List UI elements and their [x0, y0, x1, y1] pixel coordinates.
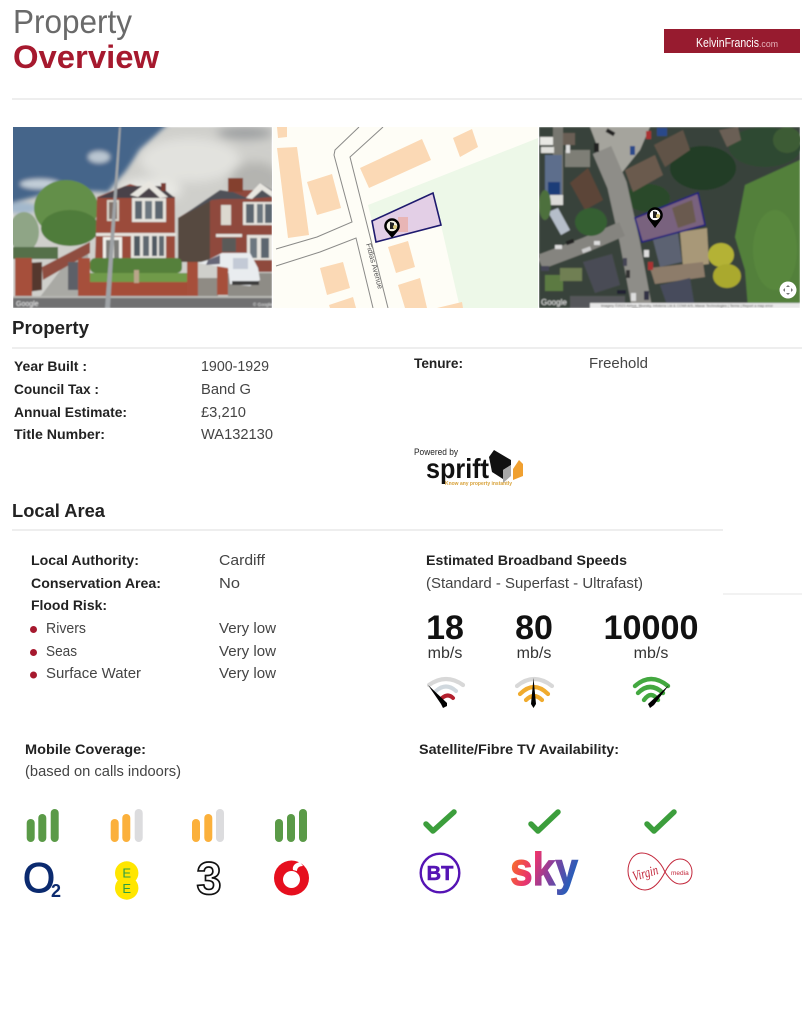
local area details: Very low — [219, 666, 277, 682]
main house — [95, 184, 175, 262]
logo: Powered by Sprift — [414, 447, 523, 487]
title — [13, 3, 159, 75]
green space — [368, 138, 538, 308]
map pin — [384, 218, 400, 238]
road — [13, 296, 272, 298]
local area details: Very low — [219, 621, 277, 637]
broadband heading — [426, 552, 643, 592]
logo: EE: E — [122, 881, 131, 896]
dark tree canopy — [670, 146, 736, 190]
property details: Tenure: — [414, 355, 463, 371]
local area details: No — [219, 576, 240, 592]
mobile coverage heading — [25, 741, 181, 780]
broadband heading: (Standard - Superfast - Ultrafast) — [426, 576, 643, 592]
attribution bar — [590, 303, 800, 308]
TV heading: Satellite/Fibre TV Availability: — [419, 741, 619, 757]
property details: WA132130 — [201, 427, 273, 443]
yellow trees — [708, 243, 734, 267]
title: Overview — [13, 39, 159, 75]
gauge: superfast — [517, 678, 552, 708]
map pin — [647, 207, 663, 228]
property details: Band G — [201, 382, 251, 398]
logo: Virgin Media: Virgin — [631, 863, 660, 885]
broadband speed figures: mb/s — [634, 645, 668, 662]
logo: BT — [421, 854, 459, 892]
broadband speed figures: mb/s — [517, 645, 551, 662]
road outlines — [276, 127, 388, 308]
local area details: Seas — [46, 644, 77, 660]
logo: Sky: sky — [510, 843, 578, 895]
local area details: Conservation Area: — [31, 575, 161, 591]
right house — [178, 190, 272, 272]
logo: EE — [115, 861, 138, 900]
property details — [14, 355, 648, 443]
street view photo: Google — [16, 301, 39, 308]
trees — [33, 180, 98, 226]
logo: EE: E — [122, 866, 131, 880]
broadband speed figures — [426, 609, 698, 662]
local area details: Very low — [219, 644, 277, 660]
logo: KelvinFrancis.com: .com — [759, 39, 778, 49]
gauge: standard — [428, 679, 463, 708]
local area details — [30, 552, 277, 682]
logo: Vodafone — [274, 860, 309, 896]
property details: £3,210 — [201, 405, 246, 421]
satellite view: Imagery ©2023 Airbus, Bluesky, Infoterra Ltd & COWI A/S, Maxar Technologies | Terms | Report a map error — [601, 304, 774, 308]
signal bars: EE — [111, 809, 143, 842]
driveway right — [228, 273, 272, 297]
parking and roads — [589, 127, 651, 172]
broadband heading: Estimated Broadband Speeds — [426, 552, 627, 568]
driveway and wall — [40, 252, 90, 297]
logo: KelvinFrancis.com: KelvinFrancis — [696, 36, 759, 50]
houses south — [653, 233, 682, 267]
hedge and lawn — [90, 258, 182, 273]
fullscreen control — [780, 282, 796, 298]
property details: 1900-1929 — [201, 359, 269, 375]
local area details: Surface Water — [46, 666, 141, 682]
mobile coverage heading: (based on calls indoors) — [25, 764, 181, 780]
broadband speed figures: mb/s — [428, 645, 462, 662]
parked cars — [541, 128, 667, 301]
van — [198, 253, 260, 286]
logo: O2: O — [23, 854, 55, 901]
signal bars: O2 — [27, 809, 59, 842]
garden tree — [575, 208, 607, 236]
property details: Freehold — [589, 356, 648, 372]
logo: O2: 2 — [51, 881, 61, 901]
buildings — [277, 127, 478, 308]
title: Property — [13, 3, 132, 40]
property details: Council Tax : — [14, 381, 99, 397]
broadband speed figures: 10000 — [604, 609, 698, 647]
logo: BT: BT — [427, 863, 453, 885]
logo: Three: 3 — [196, 853, 222, 904]
broadband speed figures: 18 — [426, 609, 464, 647]
street name: Fidlas Avenue — [364, 242, 385, 290]
grass field — [735, 160, 800, 308]
property details: Year Built : — [14, 358, 87, 374]
property details: Title Number: — [14, 426, 105, 442]
front wall — [87, 282, 188, 296]
site plan map — [273, 127, 538, 308]
signal bars: Three — [192, 809, 224, 842]
plot overlay — [635, 193, 705, 242]
signal bars: Vodafone — [275, 809, 307, 842]
plot outline — [372, 193, 441, 242]
satellite view: Google — [541, 298, 567, 307]
lamp post — [105, 127, 121, 308]
local area details: Rivers — [46, 621, 86, 637]
satellite view — [539, 127, 801, 308]
logo: Virgin Media — [628, 853, 692, 890]
logo: Powered by Sprift: Know any property instantly — [445, 481, 513, 487]
logo: Virgin Media: media — [671, 870, 689, 877]
check marks — [426, 812, 674, 831]
logo: KelvinFrancis.com — [664, 29, 800, 53]
logo: Powered by Sprift: sprift — [426, 453, 489, 484]
gauge: ultrafast — [635, 679, 669, 708]
logo: Powered by Sprift: Powered by — [414, 447, 458, 457]
broadband speed figures: 80 — [515, 609, 553, 647]
street view photo: © Google — [253, 301, 273, 307]
local area details: Cardiff — [219, 553, 266, 569]
street view photo — [5, 120, 280, 308]
heading: Property: Property — [12, 318, 89, 338]
local area details: Flood Risk: — [31, 597, 107, 613]
roofs — [654, 130, 690, 167]
heading: Local Area: Local Area — [12, 501, 106, 521]
mobile coverage heading: Mobile Coverage: — [25, 741, 146, 757]
local area details: Local Authority: — [31, 552, 139, 568]
property details: Annual Estimate: — [14, 404, 127, 420]
